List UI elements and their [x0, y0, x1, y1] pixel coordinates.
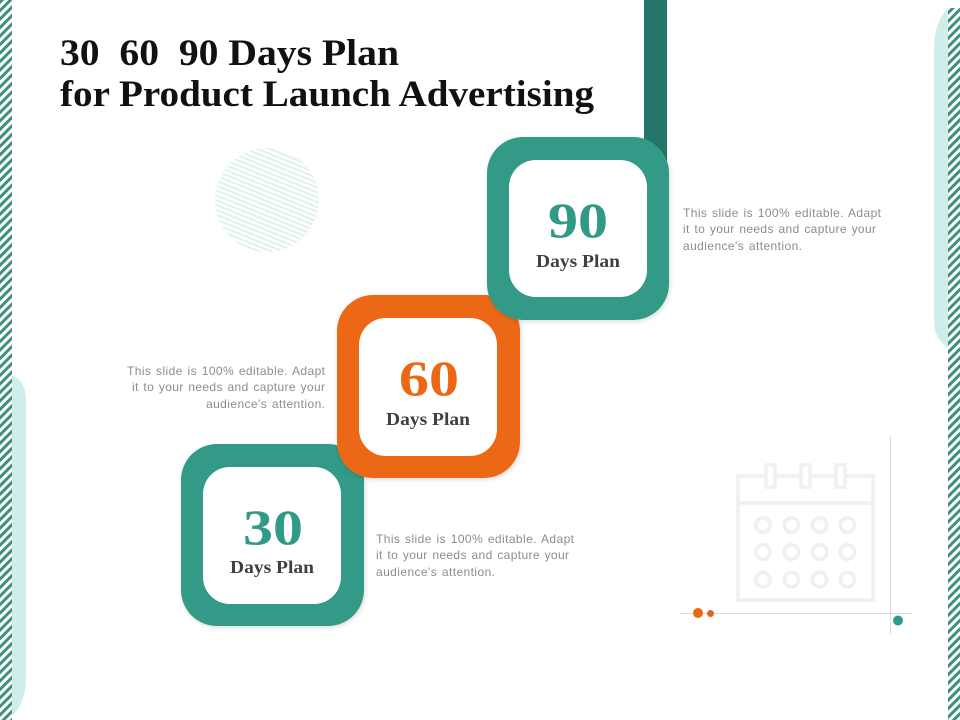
text: 90 days description: [683, 206, 882, 253]
card: 90 days plan: [487, 137, 669, 320]
card: 30 days plan: 30: [243, 499, 303, 555]
text: 30 days description: This slide is 100% editable. Adapt: [376, 532, 575, 546]
striped decorative circle: [215, 148, 319, 252]
right stripe band: [948, 8, 960, 720]
text: 60 days description: it to your needs and capture your: [132, 380, 325, 394]
text: 60 days description: [127, 364, 326, 411]
card: 90 days plan: Days Plan: [536, 251, 620, 271]
left stripe band: [0, 0, 12, 720]
large orange dot: [693, 608, 703, 618]
text: 30 days description: it to your needs and capture your: [376, 548, 569, 562]
card: 60 days plan: [337, 295, 520, 478]
text: 90 days description: This slide is 100% editable. Adapt: [683, 206, 882, 220]
card: 90 days plan: 90: [548, 192, 608, 248]
dark teal vertical bar: [644, 0, 667, 170]
small orange dot: [707, 610, 714, 617]
text: 90 days description: it to your needs and capture your: [683, 222, 876, 236]
card: 30 days plan: [181, 444, 364, 626]
card: 60 days plan: Days Plan: [386, 409, 470, 429]
title: for Product Launch Advertising: [60, 74, 594, 115]
title: 30 60 90 Days Plan: [60, 33, 399, 74]
text: 30 days description: audience's attention.: [376, 565, 495, 579]
text: 60 days description: audience's attention.: [206, 397, 325, 411]
card: 60 days plan: 60: [399, 350, 459, 406]
title: [60, 33, 594, 115]
vertical axis line: [890, 436, 892, 634]
teal dot: [893, 616, 903, 626]
horizontal axis line: [680, 612, 912, 614]
card: 30 days plan: Days Plan: [230, 557, 314, 577]
text: 60 days description: This slide is 100% editable. Adapt: [127, 364, 326, 378]
left light panel: [12, 375, 26, 716]
text: 90 days description: audience's attention.: [683, 239, 802, 253]
icon: calendar: [738, 465, 873, 600]
text: 30 days description: [376, 532, 575, 579]
right light panel: [934, 8, 948, 348]
